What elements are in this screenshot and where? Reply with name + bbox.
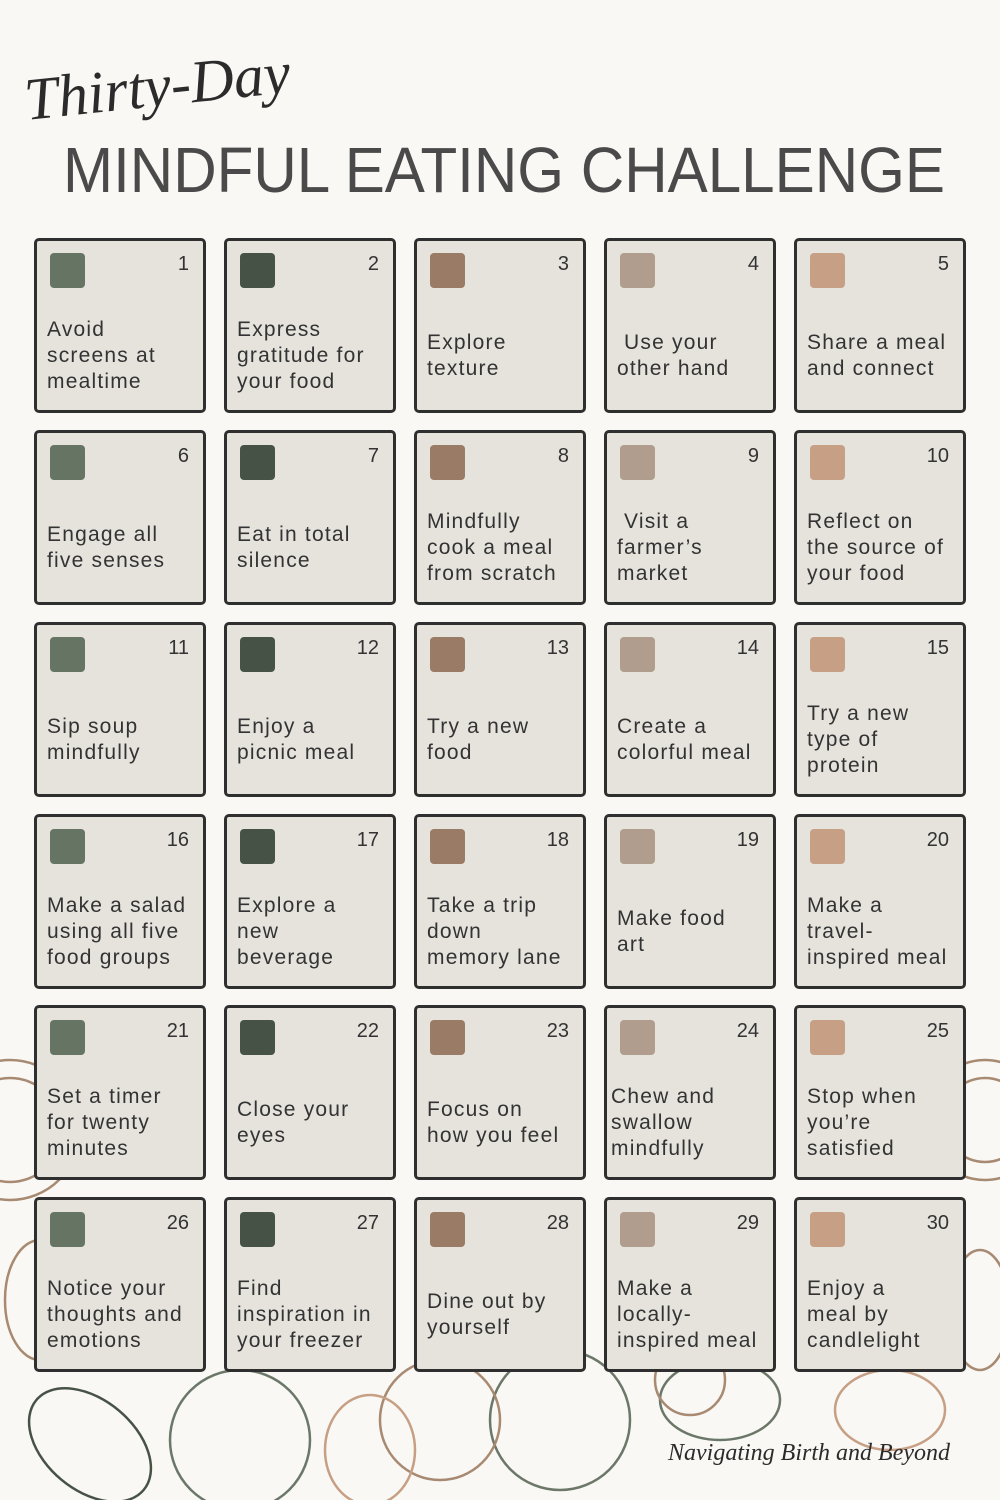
- day 29: [604, 1197, 776, 1372]
- day 15: type of: [807, 728, 878, 751]
- day 24: [604, 1005, 776, 1180]
- day 29: locally-: [617, 1303, 692, 1326]
- day 9: [604, 430, 776, 605]
- day 26: Notice your: [47, 1277, 166, 1300]
- day 24: Chew and: [611, 1085, 715, 1108]
- day 7: Eat in total: [237, 523, 351, 546]
- day 3: [414, 238, 586, 413]
- day 30: [794, 1197, 966, 1372]
- day 29: Make a: [617, 1277, 693, 1300]
- day 5: and connect: [807, 357, 935, 380]
- day 21: for twenty: [47, 1111, 150, 1134]
- day 11: mindfully: [47, 741, 141, 764]
- day 19: Make food: [617, 907, 726, 930]
- day 28: Dine out by: [427, 1290, 546, 1313]
- day 10: your food: [807, 562, 905, 585]
- day 26: [34, 1197, 206, 1372]
- day 5: 5: [938, 253, 949, 275]
- day 28: yourself: [427, 1316, 510, 1339]
- day 18: memory lane: [427, 946, 562, 969]
- day 9: farmer’s: [617, 536, 703, 559]
- day 5: [794, 238, 966, 413]
- day 13: [414, 622, 586, 797]
- calendar grid: [34, 238, 966, 1372]
- day 29: 29: [737, 1212, 759, 1234]
- day 18: down: [427, 920, 482, 943]
- day 10: 10: [927, 445, 949, 467]
- day 26: thoughts and: [47, 1303, 183, 1326]
- day 16: 16: [167, 829, 189, 851]
- day 1: Avoid: [47, 318, 105, 341]
- day 17: 17: [357, 829, 379, 851]
- day 2: Express: [237, 318, 321, 341]
- day 22: Close your: [237, 1098, 349, 1121]
- day 1: screens at: [47, 344, 156, 367]
- day 12: Enjoy a: [237, 715, 315, 738]
- day 25: 25: [927, 1020, 949, 1042]
- day 12: 12: [357, 637, 379, 659]
- day 9: 9: [748, 445, 759, 467]
- day 26: emotions: [47, 1329, 142, 1352]
- day 2: 2: [368, 253, 379, 275]
- day 20: inspired meal: [807, 946, 948, 969]
- day 13: Try a new: [427, 715, 529, 738]
- day 25: you’re: [807, 1111, 871, 1134]
- day 20: Make a: [807, 894, 883, 917]
- day 8: Mindfully: [427, 510, 521, 533]
- day 28: 28: [547, 1212, 569, 1234]
- day 8: from scratch: [427, 562, 557, 585]
- day 2: your food: [237, 370, 335, 393]
- day 30: Enjoy a: [807, 1277, 885, 1300]
- day 3: Explore: [427, 331, 507, 354]
- day 21: 21: [167, 1020, 189, 1042]
- day 30: meal by: [807, 1303, 889, 1326]
- day 23: 23: [547, 1020, 569, 1042]
- day 12: picnic meal: [237, 741, 355, 764]
- day 17: Explore a: [237, 894, 337, 917]
- day 14: [604, 622, 776, 797]
- day 22: 22: [357, 1020, 379, 1042]
- day 23: [414, 1005, 586, 1180]
- day 19: art: [617, 933, 645, 956]
- day 17: beverage: [237, 946, 334, 969]
- day 3: 3: [558, 253, 569, 275]
- day 23: Focus on: [427, 1098, 523, 1121]
- day 21: minutes: [47, 1137, 129, 1160]
- day 23: how you feel: [427, 1124, 559, 1147]
- day 15: [794, 622, 966, 797]
- day 10: [794, 430, 966, 605]
- day 27: your freezer: [237, 1329, 363, 1352]
- day 10: the source of: [807, 536, 944, 559]
- day 6: Engage all: [47, 523, 158, 546]
- day 16: Make a salad: [47, 894, 186, 917]
- day 17: [224, 814, 396, 989]
- day 27: Find: [237, 1277, 283, 1300]
- day 15: Try a new: [807, 702, 909, 725]
- day 12: [224, 622, 396, 797]
- day 4: [604, 238, 776, 413]
- day 15: 15: [927, 637, 949, 659]
- day 14: Create a: [617, 715, 707, 738]
- script subtitle: Thirty-Day: Thirty-Day: [21, 39, 293, 133]
- day 24: mindfully: [611, 1137, 705, 1160]
- day 25: [794, 1005, 966, 1180]
- day 19: [604, 814, 776, 989]
- day 8: 8: [558, 445, 569, 467]
- day 15: protein: [807, 754, 880, 777]
- day 16: food groups: [47, 946, 171, 969]
- day 4: Use your: [624, 331, 718, 354]
- day 26: 26: [167, 1212, 189, 1234]
- day 11: Sip soup: [47, 715, 138, 738]
- day 2: [224, 238, 396, 413]
- day 18: 18: [547, 829, 569, 851]
- day 6: five senses: [47, 549, 165, 572]
- day 17: new: [237, 920, 279, 943]
- day 2: gratitude for: [237, 344, 365, 367]
- footer signature: Navigating Birth and Beyond: [668, 1440, 950, 1466]
- day 7: [224, 430, 396, 605]
- day 7: 7: [368, 445, 379, 467]
- day 18: Take a trip: [427, 894, 537, 917]
- day 10: Reflect on: [807, 510, 914, 533]
- day 9: Visit a: [624, 510, 689, 533]
- day 4: other hand: [617, 357, 729, 380]
- day 20: [794, 814, 966, 989]
- day 24: swallow: [611, 1111, 693, 1134]
- day 6: [34, 430, 206, 605]
- day 27: inspiration in: [237, 1303, 372, 1326]
- day 1: [34, 238, 206, 413]
- day 27: [224, 1197, 396, 1372]
- day 28: [414, 1197, 586, 1372]
- day 7: silence: [237, 549, 311, 572]
- day 11: 11: [168, 637, 189, 659]
- day 16: using all five: [47, 920, 179, 943]
- day 30: 30: [927, 1212, 949, 1234]
- day 8: [414, 430, 586, 605]
- day 20: travel-: [807, 920, 874, 943]
- day 24: 24: [737, 1020, 759, 1042]
- day 30: candlelight: [807, 1329, 921, 1352]
- day 16: [34, 814, 206, 989]
- day 9: market: [617, 562, 688, 585]
- day 4: 4: [748, 253, 759, 275]
- day 25: satisfied: [807, 1137, 895, 1160]
- day 14: 14: [737, 637, 759, 659]
- day 1: mealtime: [47, 370, 142, 393]
- day 27: 27: [357, 1212, 379, 1234]
- day 13: 13: [547, 637, 569, 659]
- day 3: texture: [427, 357, 500, 380]
- day 19: 19: [737, 829, 759, 851]
- day 18: [414, 814, 586, 989]
- day 21: [34, 1005, 206, 1180]
- day 14: colorful meal: [617, 741, 752, 764]
- day 11: [34, 622, 206, 797]
- day 1: 1: [178, 253, 189, 275]
- day 8: cook a meal: [427, 536, 553, 559]
- day 6: 6: [178, 445, 189, 467]
- day 13: food: [427, 741, 473, 764]
- day 22: eyes: [237, 1124, 286, 1147]
- day 20: 20: [927, 829, 949, 851]
- day 5: Share a meal: [807, 331, 946, 354]
- title: MINDFUL EATING CHALLENGE: [63, 134, 945, 206]
- day 21: Set a timer: [47, 1085, 162, 1108]
- day 25: Stop when: [807, 1085, 917, 1108]
- day 22: [224, 1005, 396, 1180]
- day 29: inspired meal: [617, 1329, 758, 1352]
